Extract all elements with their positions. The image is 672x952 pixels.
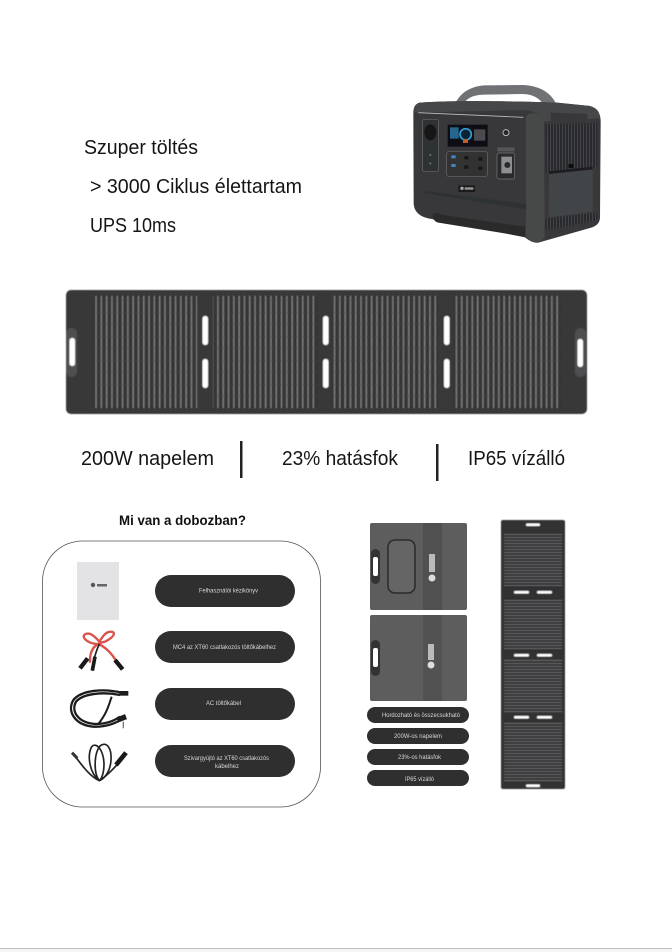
feature: cycle life: > 3000 Ciklus élettartam [90,176,302,198]
panel hinge slots [202,316,450,388]
label: MC4 cable [155,631,295,663]
panel cell blocks [92,296,561,408]
spec: power: 200W napelem [81,448,214,470]
panel right handle [575,328,586,377]
solar panel, unfolded [66,290,587,414]
feature pills [367,707,469,786]
feature: UPS: UPS 10ms [90,215,176,237]
panel left handle [66,328,77,377]
heading: what's in the box: Mi van a dobozban? [119,512,246,528]
pill: 200W: 200W-os napelem [394,734,442,740]
label: AC cable: AC töltőkábel [206,701,241,707]
label: AC cable [155,688,295,720]
pill: portable: Hordozható és összecsukható [382,713,461,719]
solar panel, vertical [501,520,565,789]
power station product image [413,85,601,243]
label: MC4 cable: MC4 az XT60 csatlakozós töltőkábelhez [173,645,276,651]
spec: efficiency: 23% hatásfok [282,448,399,470]
pill: 23%: 23%-os hatásfok [398,755,442,761]
slots [514,524,552,787]
label: manual [155,575,295,607]
icon: MC4 cable [80,632,123,671]
pill: IP65: IP65 vízálló [405,777,435,783]
feature list [84,137,302,237]
icon: AC cable [71,690,128,728]
icon: user manual [77,562,119,620]
panel: box contents [42,541,320,807]
spec: waterproof: IP65 vízálló [468,448,565,470]
label: car charger cable [155,745,295,777]
folded panel, back with pouch [370,523,467,610]
label: manual: Felhasználói kézikönyv [199,588,258,594]
label: car charger cable: kábelhez [215,764,239,770]
folded panel, back [370,615,467,701]
label: car charger cable: Szivargyújtó az XT60 csatlakozós [184,756,269,762]
panel spec row [81,441,565,481]
feature: super charging: Szuper töltés [84,137,198,159]
icon: car charger cable [72,744,126,781]
